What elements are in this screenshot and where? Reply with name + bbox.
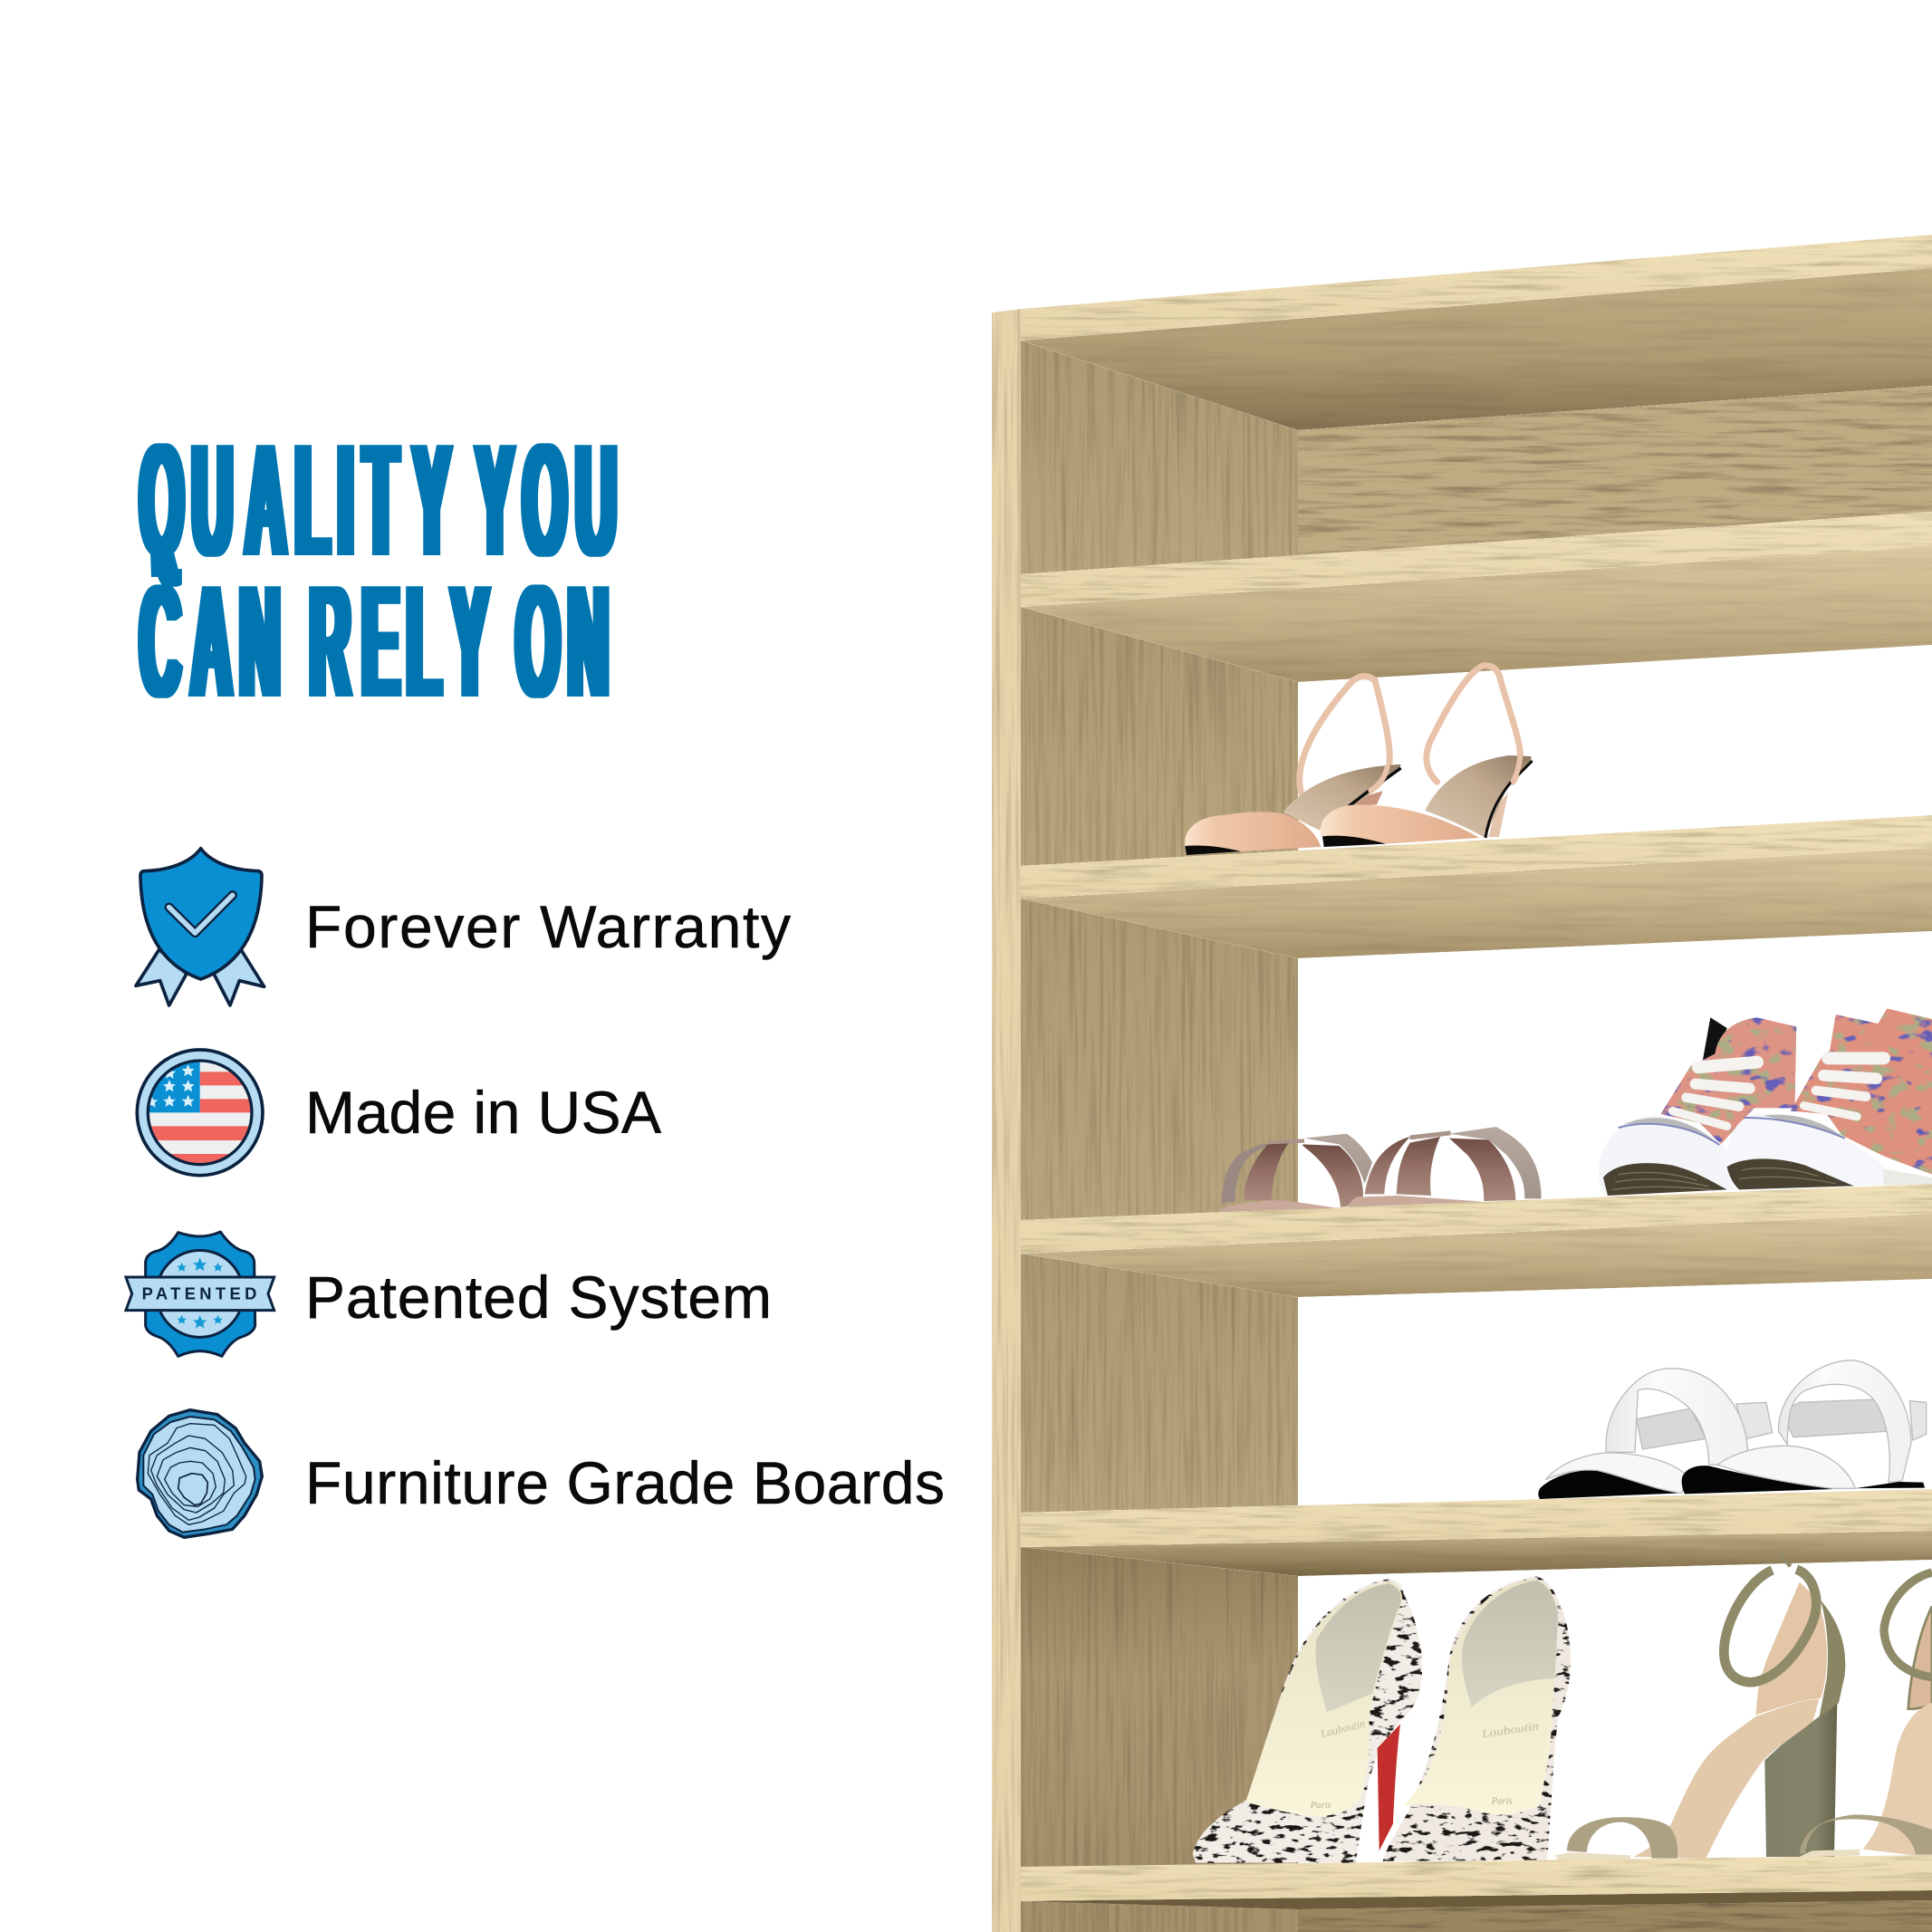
shelf 6 front edge (1021, 1855, 1932, 1901)
label: forever warranty: Forever Warranty (305, 893, 791, 960)
right slingback (1321, 666, 1533, 847)
label: furniture grade boards: Furniture Grade Boards (305, 1449, 945, 1516)
shoes: patterned high-top sneakers (1599, 1008, 1932, 1196)
feature: patented system (126, 1232, 772, 1356)
icon: patented seal (126, 1232, 274, 1356)
bottom back panel (1298, 1900, 1932, 1932)
right pump (1383, 1576, 1571, 1861)
side panel 5 (1021, 1547, 1298, 1867)
top shelf front edge (1021, 235, 1932, 341)
feature: forever warranty (136, 849, 791, 1005)
shelf 6 underside (1021, 1890, 1932, 1909)
shoes: tan ankle strap heels (1555, 1553, 1932, 1860)
outer side edge (992, 309, 1021, 1932)
right sneaker (1725, 1008, 1932, 1189)
icon: patented seal: PATENTED (142, 1283, 256, 1302)
label: made in usa: Made in USA (305, 1079, 661, 1146)
side panel 3 (1021, 899, 1298, 1220)
shelf 4 underside (1021, 1214, 1932, 1297)
feature: made in usa (137, 1050, 661, 1176)
shelf 2 underside (1021, 546, 1932, 682)
left pump: Paris (1310, 1801, 1331, 1811)
side panel 1 (1021, 341, 1298, 574)
side panel 6 (1021, 1901, 1298, 1932)
right ankle strap heel (1800, 1572, 1932, 1858)
shelf 2 front edge (1021, 512, 1932, 607)
left sandal (1218, 1134, 1372, 1211)
title line two: CAN RELY ON (139, 553, 609, 732)
shoes: rose strap sandals (1218, 1127, 1542, 1211)
title (139, 411, 616, 732)
icon: tree rings (138, 1410, 262, 1537)
shelf 5 underside (1021, 1531, 1932, 1576)
feature: furniture grade boards (138, 1410, 945, 1537)
right sandal (1347, 1127, 1542, 1207)
shelf 3 underside (1021, 848, 1932, 958)
side panel 4 (1021, 1254, 1298, 1513)
red sole heel (1378, 1724, 1400, 1850)
right pump: Paris (1491, 1797, 1513, 1807)
icon: shield with ribbons (136, 849, 264, 1005)
shelf 5 front edge (1021, 1489, 1932, 1547)
left sneaker (1599, 1017, 1796, 1196)
shelf 3 front edge (1021, 815, 1932, 899)
top shelf underside (1021, 268, 1932, 430)
shoes: snakeskin pumps (1193, 1576, 1571, 1863)
shelf 4 front edge (1021, 1184, 1932, 1254)
left slingback (1185, 677, 1401, 855)
right pump: Louboutin (1480, 1720, 1540, 1740)
left pump: Louboutin (1319, 1717, 1367, 1740)
label: patented system: Patented System (305, 1264, 772, 1331)
icon: flag badge (137, 1050, 263, 1176)
feature list (126, 849, 945, 1537)
left ankle strap heel (1555, 1553, 1845, 1860)
right white sandal (1682, 1360, 1927, 1494)
side panel 2 (1021, 607, 1298, 866)
back panel (1298, 386, 1932, 555)
left pump (1193, 1579, 1422, 1863)
shoes: peach slingback heels (1185, 666, 1533, 855)
left white sandal (1538, 1369, 1773, 1499)
shoes: white strap sandals (1538, 1360, 1927, 1499)
title line one: QUALITY YOU (139, 411, 616, 591)
shelving unit (992, 235, 1932, 1932)
